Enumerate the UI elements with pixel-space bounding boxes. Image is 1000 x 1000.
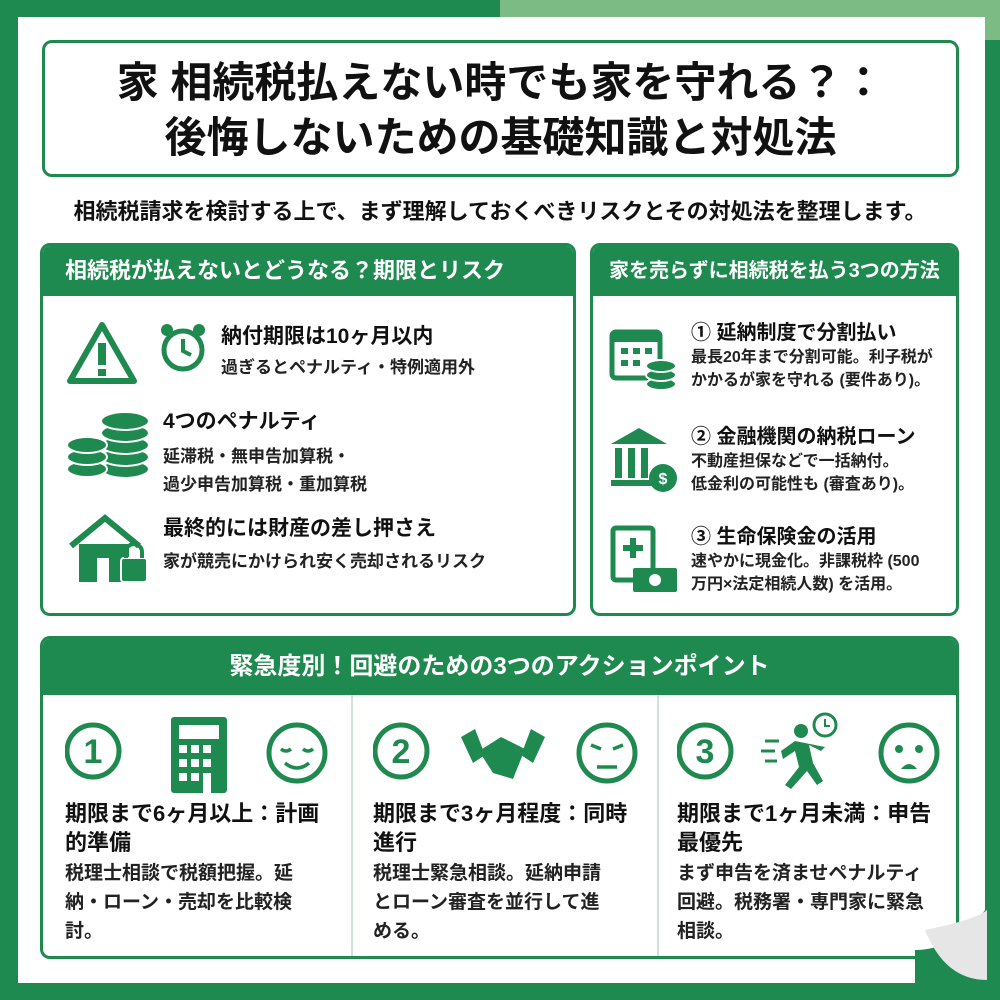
text: method 3: ③ 生命保険金の活用: [691, 526, 877, 548]
text: method 1: [691, 322, 933, 389]
text: action 3: 期限まで1ヶ月未満：申告最優先: [677, 801, 931, 855]
column 1: [65, 717, 328, 942]
text: method 2: 不動産担保などで一括納付。: [691, 453, 899, 470]
text: method 2: 低金利の可能性も (審査あり)。: [691, 476, 914, 493]
icon: number 1 calculator smile: 1: [84, 733, 102, 771]
icon: number 3 runner face: 3: [696, 733, 714, 771]
text: method 1: 最長20年まで分割可能。利子税が: [691, 349, 933, 366]
text: method 1: かかるが家を守れる (要件あり)。: [691, 372, 930, 389]
text: seizure: 家が競売にかけられ安く売却されるリスク: [163, 552, 486, 571]
header: risks: 相続税が払えないとどうなる？期限とリスク: [65, 258, 505, 283]
background light band: [500, 0, 1000, 40]
panel: actions: [40, 636, 959, 959]
header: methods: 家を売らずに相続税を払う3つの方法: [609, 260, 940, 282]
text: action 2: [373, 801, 627, 942]
icon: calendar coins: [610, 330, 675, 389]
text: method 3: 速やかに現金化。非課税枠 (500: [691, 553, 919, 570]
header: actions: 緊急度別！回避のための3つのアクションポイント: [229, 653, 770, 680]
title box: [42, 40, 959, 177]
text: action 1: 税理士相談で税額把握。延納・ローン・売却を比較検討。: [65, 863, 293, 942]
text: penalties: 延滞税・無申告加算税・: [163, 447, 350, 466]
header: risks: [43, 246, 573, 296]
text: method 3: [691, 526, 919, 593]
text: action 1: 期限まで6ヶ月以上：計画的準備: [65, 801, 319, 855]
text: deadline: 過ぎるとペナルティ・特例適用外: [221, 358, 475, 377]
icon: insurance: [610, 526, 677, 592]
column 3: [657, 695, 957, 959]
icon: number 1 calculator smile: [65, 717, 328, 793]
icon: bank: [611, 428, 677, 492]
header: actions: [43, 639, 956, 695]
icon: number 3 runner face: [677, 712, 940, 789]
text: seizure: [163, 516, 486, 571]
icon: bank: $: [659, 471, 668, 488]
subtitle: 相続税請求を検討する上で、まず理解しておくべきリスクとその対処法を整理します。: [74, 199, 926, 224]
panel: risks: [40, 243, 576, 616]
title box: 後悔しないための基礎知識と対処法: [164, 114, 836, 161]
text: action 2: 税理士緊急相談。延納申請とローン審査を並行して進める。: [373, 863, 601, 942]
text: seizure: 最終的には財産の差し押さえ: [163, 517, 436, 540]
column 2: [351, 695, 656, 959]
page curl: [915, 910, 987, 983]
text: method 2: ② 金融機関の納税ローン: [691, 426, 916, 448]
text: action 1: [65, 801, 319, 942]
icon: warning: [67, 322, 137, 384]
text: deadline: 納付期限は10ヶ月以内: [221, 325, 433, 348]
icon: house lock: [69, 514, 146, 582]
text: method 3: 万円×法定相続人数) を活用。: [691, 576, 902, 593]
icon: clock: [161, 324, 205, 372]
text: method 2: [691, 426, 916, 493]
text: action 3: まず申告を済ませペナルティ回避。税務署・専門家に緊急相談。: [677, 863, 924, 942]
text: penalties: [163, 410, 367, 494]
text: method 1: ① 延納制度で分割払い: [691, 322, 897, 344]
header: methods: [593, 246, 956, 296]
panel: methods: [590, 243, 959, 616]
text: action 3: [677, 801, 931, 942]
text: deadline: [221, 324, 475, 377]
icon: number 2 handshake face: 2: [392, 733, 410, 771]
text: penalties: 過少申告加算税・重加算税: [163, 475, 367, 494]
icon: coins: [68, 413, 148, 477]
text: penalties: 4つのペナルティ: [163, 410, 320, 433]
icon: number 2 handshake face: [373, 722, 638, 784]
title box: 家 相続税払えない時でも家を守れる？：: [117, 59, 884, 106]
text: action 2: 期限まで3ヶ月程度：同時進行: [373, 801, 627, 855]
